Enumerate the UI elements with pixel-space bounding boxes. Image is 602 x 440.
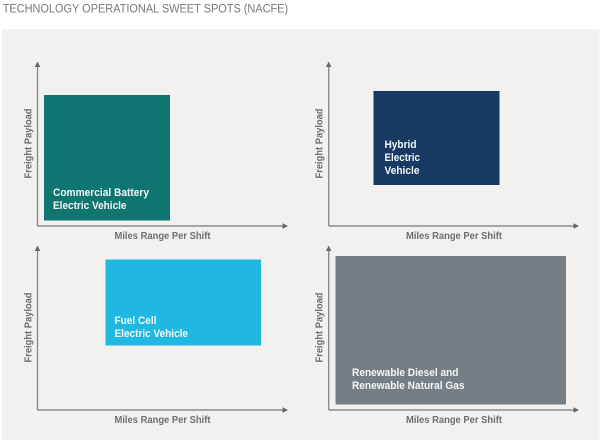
y axis arrow <box>326 246 331 410</box>
block label: Electric <box>384 152 420 164</box>
block label: Fuel Cell <box>114 315 156 327</box>
title: TECHNOLOGY OPERATIONAL SWEET SPOTS (NACFE) <box>3 4 288 16</box>
panel: renewable diesel and renewable natural gas <box>314 246 579 426</box>
y axis label: Freight Payload <box>24 292 35 362</box>
x axis arrow <box>329 407 579 413</box>
x axis label: Miles Range Per Shift <box>406 415 503 426</box>
block label: Renewable Natural Gas <box>352 380 464 392</box>
sweet spot block <box>106 260 261 346</box>
panel: commercial battery electric vehicle <box>24 62 288 242</box>
y axis arrow <box>35 62 40 226</box>
block label: Renewable Diesel and <box>352 367 458 379</box>
block label: Hybrid <box>384 139 416 151</box>
x axis arrow <box>38 407 288 413</box>
y axis label: Freight Payload <box>314 292 326 362</box>
y axis label: Freight Payload <box>24 108 35 178</box>
sweet spot block <box>336 256 566 404</box>
block label: Electric Vehicle <box>114 328 188 340</box>
sweet spot block <box>44 95 170 220</box>
x axis label: Miles Range Per Shift <box>114 415 211 426</box>
x axis label: Miles Range Per Shift <box>114 231 211 242</box>
y axis arrow <box>326 62 331 226</box>
y axis label: Freight Payload <box>314 108 326 178</box>
y axis arrow <box>35 246 40 410</box>
x axis arrow <box>329 223 579 229</box>
x axis label: Miles Range Per Shift <box>406 231 503 242</box>
sweet spot block <box>374 91 500 185</box>
block label: Commercial Battery <box>53 187 150 199</box>
block label: Vehicle <box>384 165 420 177</box>
panel: fuel cell electric vehicle <box>24 246 288 426</box>
panel: hybrid electric vehicle <box>314 62 579 242</box>
x axis arrow <box>38 223 288 229</box>
block label: Electric Vehicle <box>53 200 126 212</box>
